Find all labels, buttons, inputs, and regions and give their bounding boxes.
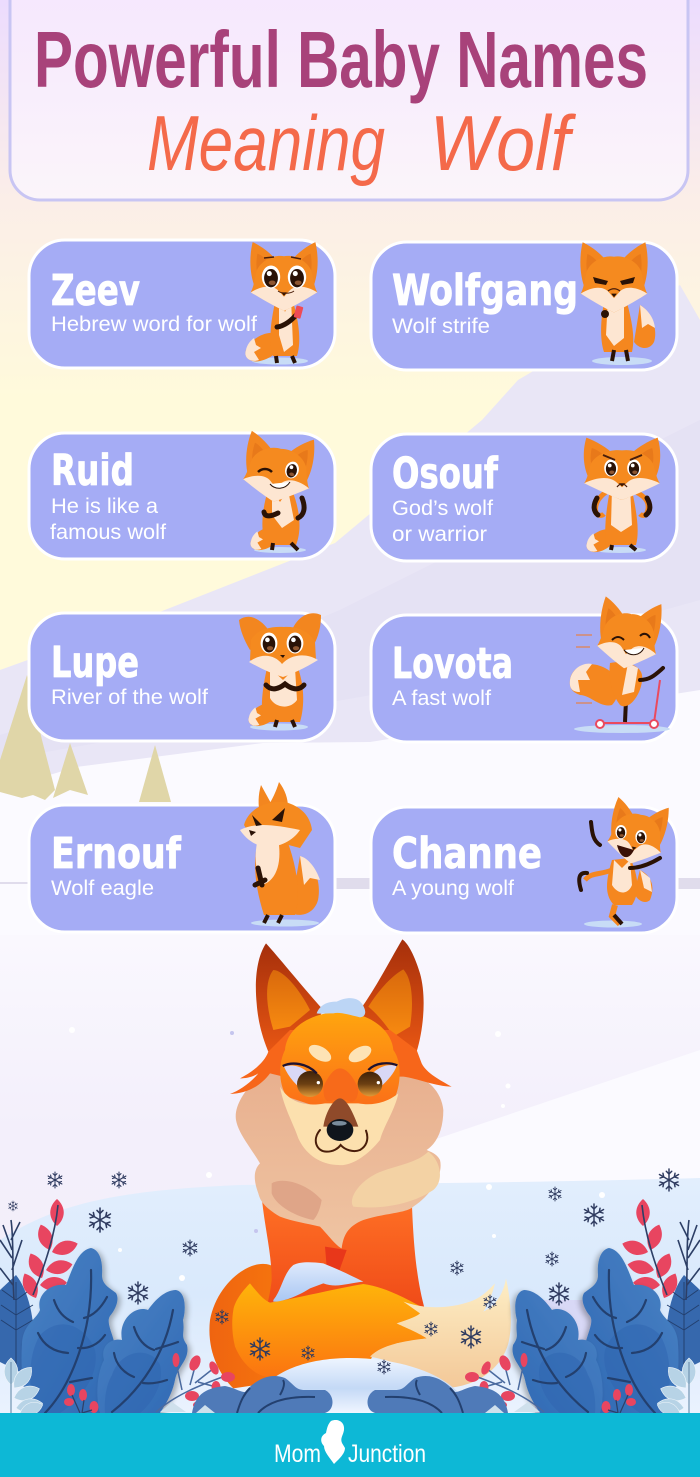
lavender hill patch bbox=[535, 1300, 610, 1413]
blue snow hill bbox=[0, 1178, 700, 1413]
card: Ernouf: Ernouf bbox=[51, 829, 182, 879]
card: Channe bbox=[371, 797, 677, 933]
falling snow dots bbox=[69, 1027, 605, 1281]
fox: Ruid bbox=[240, 431, 316, 553]
card: Wolfgang: Wolf strife bbox=[392, 315, 490, 338]
fox body bbox=[262, 1197, 425, 1310]
card: Ruid: famous wolf bbox=[50, 521, 166, 544]
lower snowy background bbox=[0, 935, 700, 1320]
snow mound bbox=[250, 1358, 470, 1413]
snow on fox paws bbox=[273, 1262, 363, 1302]
card: Osouf: Osouf bbox=[392, 449, 499, 499]
card: Lovota: A fast wolf bbox=[392, 687, 491, 710]
fox: Osouf bbox=[584, 438, 660, 553]
card: Ernouf: Wolf eagle bbox=[51, 877, 154, 900]
card: Zeev: Hebrew word for wolf bbox=[51, 313, 257, 336]
fox: Lovota on scooter bbox=[570, 596, 670, 733]
pale diagonal slope bbox=[380, 1050, 700, 1190]
fox: Wolfgang bbox=[580, 242, 655, 365]
card: Channe: Channe bbox=[392, 829, 542, 879]
fox face bbox=[230, 998, 452, 1165]
MomJunction logo bbox=[274, 1420, 426, 1468]
card: Lupe bbox=[29, 613, 335, 741]
card: Lovota: Lovota bbox=[392, 639, 513, 689]
footer bar bbox=[0, 1413, 700, 1477]
card: Osouf: God’s wolf bbox=[392, 497, 493, 520]
horizontal ground stripes bbox=[0, 878, 700, 889]
fox: Ernouf bbox=[240, 782, 320, 926]
fox tail tip bbox=[370, 1278, 511, 1388]
foliage: left bbox=[0, 1199, 332, 1419]
card: Ruid bbox=[29, 431, 335, 559]
MomJunction logo: Mom bbox=[274, 1440, 321, 1468]
fox tail front bbox=[232, 1283, 427, 1377]
title line 2 bbox=[147, 99, 577, 187]
fox: Channe dancing bbox=[579, 797, 671, 928]
card: Zeev bbox=[29, 240, 335, 368]
MomJunction logo: Junction bbox=[348, 1440, 426, 1468]
main fox illustration bbox=[209, 939, 511, 1388]
card: Lovota bbox=[371, 596, 677, 742]
card: Ruid: He is like a bbox=[51, 495, 158, 518]
card: Osouf: or warrior bbox=[392, 523, 487, 546]
card: Channe: A young wolf bbox=[392, 877, 514, 900]
card: Zeev: Zeev bbox=[51, 266, 140, 316]
background mountains bbox=[0, 285, 700, 950]
card: Lupe: Lupe bbox=[51, 638, 139, 688]
card: Wolfgang bbox=[371, 242, 677, 370]
title line 2: Wolf bbox=[430, 99, 577, 187]
card: Lupe: River of the wolf bbox=[51, 686, 208, 709]
fox chest fur bbox=[236, 1072, 443, 1248]
title panel bbox=[10, 0, 688, 200]
fox ears bbox=[256, 939, 424, 1063]
card: Osouf bbox=[371, 434, 677, 561]
title line 2: Meaning bbox=[147, 99, 385, 187]
background trees bbox=[0, 675, 171, 802]
card: Ruid: Ruid bbox=[51, 446, 134, 496]
fox: Zeev bbox=[245, 242, 318, 364]
card: Ernouf bbox=[29, 782, 335, 932]
card: Wolfgang: Wolfgang bbox=[392, 266, 578, 316]
snowflakes bbox=[9, 1169, 679, 1374]
fox: Lupe bbox=[239, 613, 321, 730]
fox tail base bbox=[209, 1264, 383, 1388]
foliage: right bbox=[368, 1199, 700, 1419]
